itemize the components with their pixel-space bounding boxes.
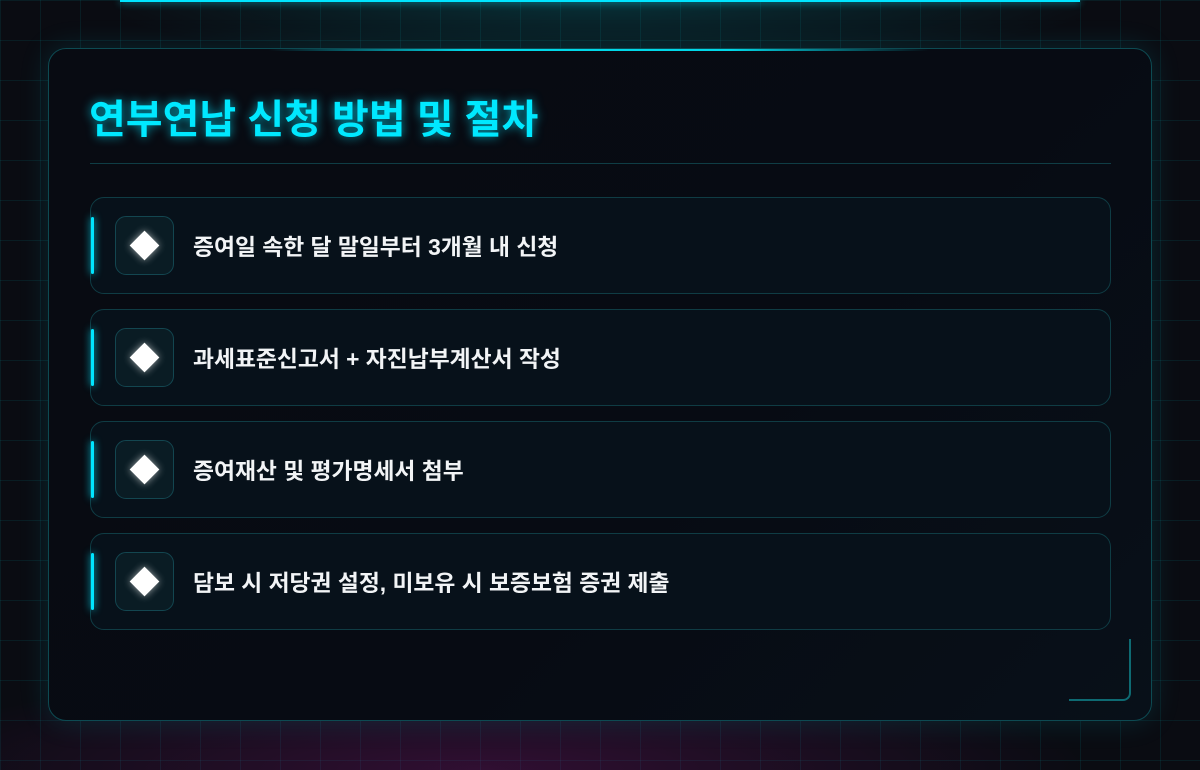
step 1 [90, 197, 1111, 294]
step 3 [90, 421, 1111, 518]
step 2 [90, 309, 1111, 406]
step 4: 담보 시 저당권 설정, 미보유 시 보증보험 증권 제출 [193, 570, 669, 596]
step 4 [90, 533, 1111, 630]
step 1: 증여일 속한 달 말일부터 3개월 내 신청 [193, 234, 558, 260]
corner bracket [1069, 639, 1131, 701]
step 3: 증여재산 및 평가명세서 첨부 [193, 458, 464, 484]
title: 연부연납 신청 방법 및 절차 [89, 98, 538, 142]
top accent line [120, 0, 1080, 2]
step 2: 과세표준신고서 + 자진납부계산서 작성 [193, 346, 561, 372]
